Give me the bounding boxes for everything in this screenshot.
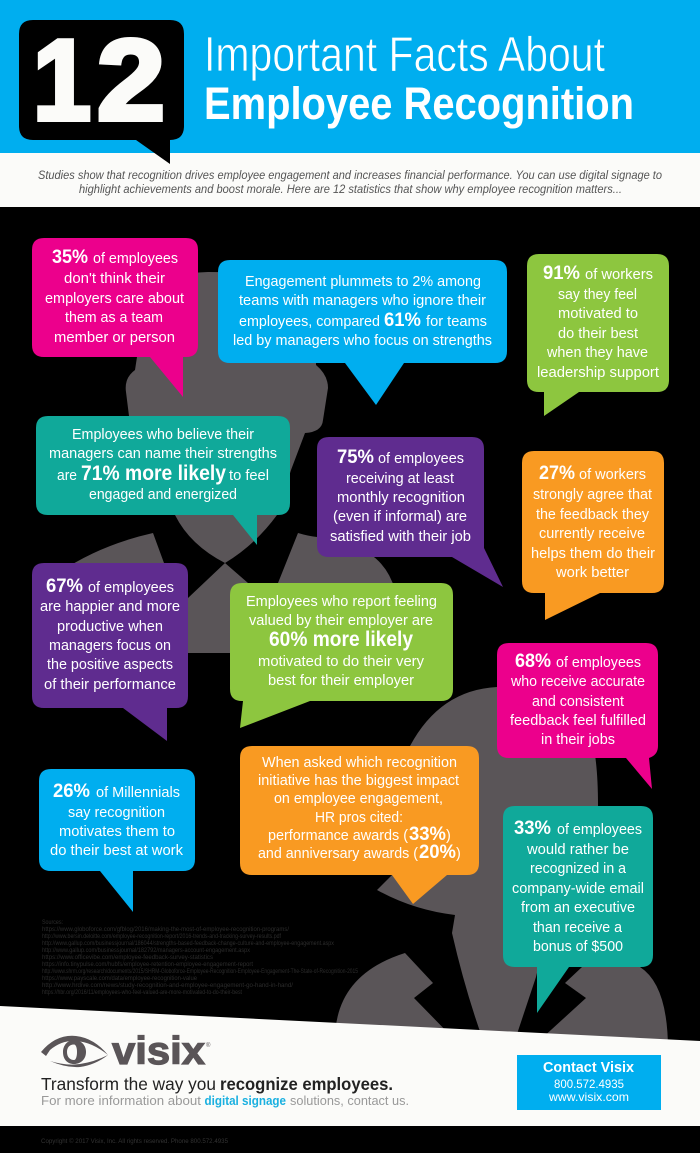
intro text	[38, 168, 662, 196]
intro text: Studies show that recognition drives employee engagement and increases financial performance. You can use digital signage to	[38, 168, 662, 182]
panel: 26% Millennials: of Millennials	[96, 784, 180, 801]
sources list: http://www.gallup.com/businessjournal/186044/strengths-based-feedback-change-culture-and-employee-engagement.aspx	[42, 941, 334, 947]
panel: 67% happier	[32, 563, 188, 741]
panel: 68% fulfilled: 68%	[515, 651, 551, 672]
panel: 91% leadership support: say they feel	[558, 286, 637, 303]
panel: 35% employers care: member or person	[54, 329, 175, 346]
panel: 91% leadership support: leadership support	[537, 364, 660, 381]
panel: engagement plummets	[218, 260, 507, 405]
panel: 91% leadership support: do their best	[558, 325, 639, 342]
panel: 67% happier: of employees	[88, 579, 174, 596]
panel: 68% fulfilled: and consistent	[532, 693, 625, 710]
panel: 67% happier: the positive aspects	[47, 656, 173, 673]
title: Employee Recognition	[204, 78, 634, 129]
panel: 75% monthly recognition: receiving at least	[346, 470, 455, 487]
sources list: http://www.bersin.deloitte.com/employee-recognition-report/2016-trends-and-tracking-survey-results.pdf	[42, 934, 281, 940]
panel: HR pros awards: on employee engagement,	[274, 791, 443, 807]
panel: 75% monthly recognition: monthly recognition	[337, 489, 465, 506]
panel: 91% leadership support: 91%	[543, 263, 580, 284]
sources list: https://info.tinypulse.com/hubfs/employee-retention-employee-engagement-report	[42, 962, 253, 968]
icon: black speech bubble with number 12	[19, 18, 184, 164]
panel: 67% happier: are happier and more	[40, 598, 180, 615]
tagline	[41, 1074, 393, 1094]
panel: 71% more likely: Employees who believe their	[72, 426, 254, 443]
panel: 35% employers care: of employees	[93, 250, 178, 267]
panel: 60% more likely: 60% more likely	[269, 628, 413, 651]
panel: engagement plummets: teams with managers who ignore their	[239, 292, 486, 309]
panel: 67% happier: 67%	[46, 576, 83, 597]
copyright: Copyright © 2017 Visix, Inc. All rights reserved. Phone 800.572.4935	[41, 1137, 228, 1145]
call to action line	[41, 1093, 409, 1108]
panel: HR pros awards: 20%	[419, 842, 456, 863]
call to action line: digital signage	[204, 1093, 286, 1108]
sources list: http://www.gallup.com/businessjournal/182792/managers-account-engagement.aspx	[42, 948, 250, 954]
contact box	[517, 1055, 661, 1110]
panel: 68% fulfilled: who receive accurate	[510, 673, 645, 690]
panel: 91% leadership support: motivated to	[558, 305, 638, 322]
icon: black speech bubble with number 12: 1	[33, 18, 91, 144]
panel: 68% fulfilled: feedback feel fulfilled	[510, 712, 646, 729]
panel: HR pros awards: initiative has the biggest impact	[258, 773, 459, 789]
panel: 27% feedback: the feedback they	[536, 506, 649, 523]
sources list: http://www.hrdive.com/news/study-recognition-and-employee-engagement-go-hand-in-hand/	[42, 983, 293, 989]
title: Important Facts About	[204, 28, 605, 82]
panel: HR pros awards: When asked which recognition	[262, 755, 457, 771]
panel: 26% Millennials: motivates them to	[59, 823, 175, 840]
panel: 33% company-wide email: than receive a	[533, 919, 623, 936]
panel: 33% company-wide email: of employees	[557, 821, 642, 838]
panel: 67% happier: managers focus on	[49, 637, 171, 654]
panel: 71% more likely: to feel	[229, 467, 269, 484]
panel: 33% company-wide email	[503, 806, 653, 1013]
panel: engagement plummets: employees, compared	[239, 313, 380, 330]
panel: 26% Millennials: say recognition	[68, 804, 165, 821]
panel: 71% more likely: managers can name their strengths	[49, 445, 277, 462]
panel: 75% monthly recognition: satisfied with their job	[330, 528, 471, 545]
sources list: https://www.officevibe.com/employee-feedback-survey-statistics	[42, 955, 213, 961]
panel: HR pros awards	[240, 746, 479, 904]
panel: 75% monthly recognition: of employees	[378, 450, 464, 467]
panel: 91% leadership support: when they have	[546, 344, 648, 361]
contact box: www.visix.com	[548, 1090, 629, 1104]
icon: black speech bubble with number 12: 2	[97, 18, 165, 144]
panel: 27% feedback: strongly agree that	[533, 486, 653, 503]
panel: 60% more likely: best for their employer	[268, 672, 414, 689]
visix logo: ®	[206, 1042, 211, 1049]
panel: 71% more likely	[36, 416, 290, 545]
panel: 35% employers care: don't think their	[64, 270, 165, 287]
panel: 60% more likely: motivated to do their very	[258, 653, 424, 670]
panel: 71% more likely: engaged and energized	[89, 486, 237, 503]
header band	[0, 0, 700, 207]
panel: engagement plummets: 61%	[384, 310, 421, 331]
title	[204, 28, 634, 129]
silhouette: top manager figure	[60, 272, 395, 653]
panel: engagement plummets: Engagement plummets to 2% among	[245, 273, 481, 290]
panel: 68% fulfilled: in their jobs	[541, 731, 615, 748]
sources list: https://hbr.org/2016/11/employees-who-feel-valued-are-more-motivated-to-do-their-best	[42, 990, 242, 996]
panel: engagement plummets: for teams	[426, 313, 487, 330]
intro strip	[0, 153, 700, 207]
visix logo	[41, 1030, 211, 1073]
panel: 33% company-wide email: bonus of $500	[533, 938, 623, 955]
panel: 71% more likely: are	[57, 467, 77, 484]
contact box: Contact Visix	[543, 1060, 634, 1076]
panel: 27% feedback: of workers	[579, 466, 646, 483]
panel: 35% employers care: employers care about	[45, 290, 185, 307]
panel: engagement plummets: led by managers who focus on strengths	[233, 332, 492, 349]
panel: 33% company-wide email: from an executive	[521, 899, 635, 916]
panel: HR pros awards: and anniversary awards (	[258, 846, 418, 862]
panel: 33% company-wide email: would rather be	[526, 841, 629, 858]
panel: 35% employers care: 35%	[52, 247, 88, 268]
panel: HR pros awards: )	[446, 828, 451, 844]
contact box: 800.572.4935	[554, 1077, 624, 1091]
panel: 35% employers care: them as a team	[65, 309, 163, 326]
tagline: recognize employees.	[220, 1074, 393, 1094]
panel: 91% leadership support	[527, 254, 669, 416]
panel: 68% fulfilled: of employees	[556, 654, 641, 671]
sources list: https://www.globoforce.com/gfblog/2016/making-the-most-of-employee-recognition-programs/	[42, 927, 289, 933]
panel: 60% more likely	[230, 583, 453, 728]
sources list: http://www.shrm.org/research/documents/2015/SHRM-Globoforce-Employee-Recognition-Employee-Engagement-The-State-of-Recognition-2015	[42, 969, 359, 975]
panel: 67% happier: of their performance	[44, 676, 176, 693]
panel: 33% company-wide email: company-wide email	[512, 880, 644, 897]
panel: 33% company-wide email: recognized in a	[530, 860, 627, 877]
panel: 26% Millennials	[39, 769, 195, 912]
silhouette: bottom right figure	[335, 687, 668, 1050]
panel: 27% feedback: currently receive	[539, 525, 645, 542]
sources list: Sources:	[42, 920, 63, 926]
call to action line: For more information about	[41, 1093, 201, 1108]
panel: 67% happier: productive when	[57, 618, 163, 635]
panel: 60% more likely: valued by their employer are	[249, 612, 433, 629]
tagline: Transform the way you	[41, 1074, 216, 1094]
panel: 27% feedback	[522, 451, 664, 620]
panel: 75% monthly recognition: (even if informal) are	[333, 508, 467, 525]
panel: 60% more likely: Employees who report feeling	[246, 593, 437, 610]
panel: HR pros awards: 33%	[409, 824, 446, 845]
panel: HR pros awards: performance awards (	[268, 828, 408, 844]
panel: 27% feedback: 27%	[539, 463, 575, 484]
sources list	[42, 920, 359, 996]
sources list: https://www.payscale.com/data/employee-recognition-value	[42, 976, 198, 982]
panel: 27% feedback: work better	[555, 564, 629, 581]
panel: 75% monthly recognition: 75%	[337, 447, 374, 468]
panel: 75% monthly recognition	[317, 437, 503, 587]
panel: 71% more likely: 71% more likely	[81, 462, 226, 485]
panel: HR pros awards: )	[456, 846, 461, 862]
intro text: highlight achievements and boost morale. Here are 12 statistics that show why employee recognition matters...	[79, 182, 622, 196]
call to action line: solutions, contact us.	[290, 1093, 409, 1108]
panel: 26% Millennials: do their best at work	[50, 842, 183, 859]
panel: 26% Millennials: 26%	[53, 781, 90, 802]
panel: 68% fulfilled	[497, 643, 658, 789]
panel: 27% feedback: helps them do their	[531, 545, 655, 562]
panel: 33% company-wide email: 33%	[514, 818, 551, 839]
footer panel	[0, 1006, 700, 1126]
panel: 35% employers care	[32, 238, 198, 397]
panel: HR pros awards: HR pros cited:	[315, 810, 403, 826]
icon: eye	[41, 1036, 108, 1067]
visix logo: visix	[112, 1030, 205, 1073]
panel: 91% leadership support: of workers	[585, 266, 653, 283]
